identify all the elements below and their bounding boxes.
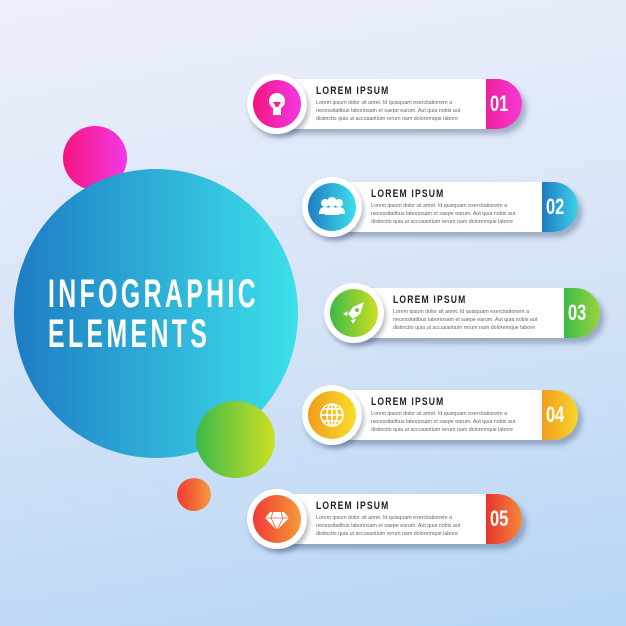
bar 02 xyxy=(324,182,578,232)
circle: magenta xyxy=(63,126,127,190)
item 04: LOREM IPSUM xyxy=(371,396,444,408)
bar 04: 04 xyxy=(546,402,564,427)
item 01: LOREM IPSUM xyxy=(316,85,389,97)
item 04 xyxy=(302,385,585,452)
title: ELEMENTS xyxy=(48,312,210,356)
item 05: LOREM IPSUM xyxy=(316,500,389,512)
item 01: Lorem ipsum dolor sit amet. Id quisquam exercitationem a necessitatibus laboriosam et saepe earum. Aut quia nobis aut distinctio quia ut accusantium rerum nam doloremque labore xyxy=(316,100,460,122)
bar 05: 05 xyxy=(490,506,508,531)
item 03 xyxy=(324,283,607,350)
title xyxy=(48,272,259,356)
item 04: Lorem ipsum dolor sit amet. Id quisquam exercitationem a necessitatibus laboriosam et saepe earum. Aut quia nobis aut distinctio quia ut accusantium rerum nam doloremque labore xyxy=(371,411,515,433)
bar 01: 01 xyxy=(490,91,508,116)
bar 02: 02 xyxy=(546,194,564,219)
bar 04 xyxy=(324,390,578,440)
icon: diamond xyxy=(247,489,307,549)
title: INFOGRAPHIC xyxy=(48,272,259,316)
item 02: Lorem ipsum dolor sit amet. Id quisquam exercitationem a necessitatibus laboriosam et saepe earum. Aut quia nobis aut distinctio quia ut accusantium rerum nam doloremque labore xyxy=(371,203,515,225)
icon: rocket xyxy=(324,283,384,343)
bar 01 xyxy=(269,79,522,129)
circle: green xyxy=(196,401,275,478)
bar 03: 03 xyxy=(568,300,586,325)
item 01 xyxy=(246,74,529,140)
item 02: LOREM IPSUM xyxy=(371,188,444,200)
bar 03 xyxy=(346,288,600,338)
circle: main blue xyxy=(14,169,298,458)
item 03: LOREM IPSUM xyxy=(393,294,466,306)
icon: lightbulb xyxy=(247,74,307,134)
icon: globe xyxy=(302,385,362,445)
item 05 xyxy=(246,489,529,556)
item 03: Lorem ipsum dolor sit amet. Id quisquam exercitationem a necessitatibus laboriosam et saepe earum. Aut quia nobis aut distinctio quia ut accusantium rerum nam doloremque labore xyxy=(393,309,537,331)
item 02 xyxy=(302,177,585,244)
bar 05 xyxy=(269,494,522,544)
circle: orange xyxy=(177,478,211,511)
item 05: Lorem ipsum dolor sit amet. Id quisquam exercitationem a necessitatibus laboriosam et saepe earum. Aut quia nobis aut distinctio quia ut accusantium rerum nam doloremque labore xyxy=(316,515,460,537)
icon: team xyxy=(302,177,362,237)
